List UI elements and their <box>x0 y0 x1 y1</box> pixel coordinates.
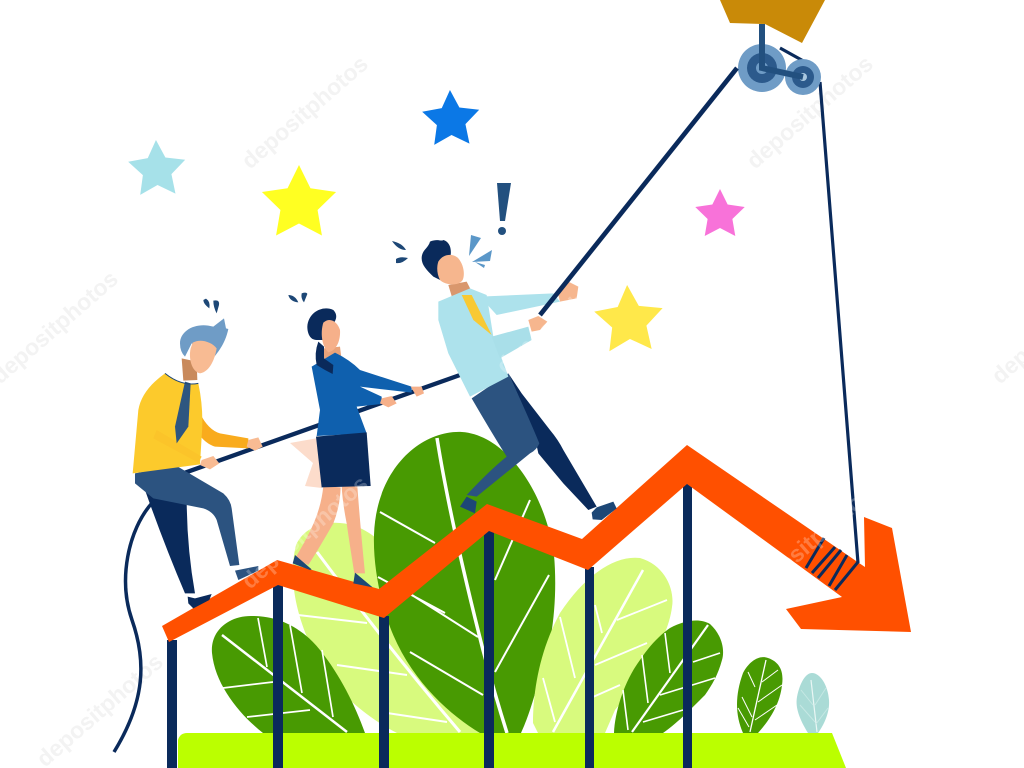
chart pillars <box>167 482 692 768</box>
leaf: light right <box>533 558 673 733</box>
watermark text over artwork: depositphotos <box>236 470 373 594</box>
rope lashing on arrow <box>806 538 858 590</box>
crate hanging <box>720 0 825 43</box>
ground <box>178 733 846 768</box>
star: yellow <box>593 283 665 352</box>
figures drawn in magnified coordinates <box>133 68 737 608</box>
rope from pulley to arrow <box>780 48 858 563</box>
watermark text over artwork: depositphotos <box>491 255 628 379</box>
watermark text over artwork: depositphotos <box>741 480 878 604</box>
red zigzag arrow <box>162 445 911 642</box>
leaf: small green <box>737 657 782 733</box>
leaf: light left <box>293 523 480 733</box>
leaf: dark left <box>212 616 365 733</box>
leaf: big dark green <box>374 432 555 733</box>
leaf: small pale teal <box>797 673 829 733</box>
pulley assembly <box>738 24 821 95</box>
figure: right man <box>422 68 737 520</box>
watermark text on background: depositphotos <box>741 50 878 174</box>
leaf: dark right <box>614 621 723 733</box>
star: bright yellow <box>262 165 336 236</box>
sweat drops man right <box>392 241 408 263</box>
figure: left man <box>133 299 263 608</box>
star: pale peach behind woman <box>290 438 322 488</box>
figure: woman <box>288 293 424 587</box>
rope upper part to pulley <box>540 68 737 315</box>
star: pink <box>695 189 745 236</box>
drops woman <box>288 293 307 302</box>
watermark text on background: depositphotos <box>236 50 373 174</box>
watermark text over artwork <box>236 255 878 604</box>
main rope through figures <box>183 375 460 473</box>
star: blue <box>421 89 480 145</box>
star: light blue <box>127 139 186 195</box>
alarm wedges <box>469 235 492 268</box>
exclamation mark <box>497 183 511 235</box>
loose rope end <box>114 503 152 752</box>
drops left man <box>203 299 219 313</box>
